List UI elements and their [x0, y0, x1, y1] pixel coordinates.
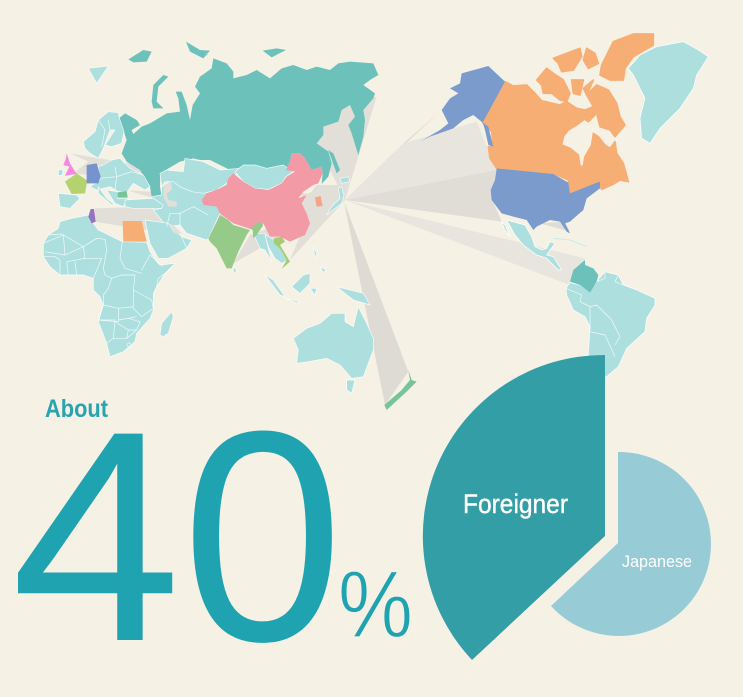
Scandinavia: [83, 112, 124, 158]
light teal countries: [43, 66, 373, 378]
Bulgaria: [117, 191, 128, 198]
New Guinea: [337, 287, 370, 305]
Sulawesi: [310, 288, 317, 295]
Ireland: [58, 169, 63, 176]
Greenland and New Zealand: [347, 42, 708, 410]
label: Japanese: Japanese: [622, 552, 692, 571]
Mexico and Central America: [507, 220, 562, 270]
India: [208, 215, 263, 268]
United States and Alaska: [420, 66, 600, 233]
Caspian Sea and Persian Gulf patches: [163, 183, 182, 234]
Vietnam: [274, 237, 290, 269]
Italy: [98, 187, 115, 205]
Borneo: [292, 273, 310, 293]
Svalbard: [88, 66, 108, 83]
New Zealand: [384, 370, 417, 410]
Kazakhstan: [160, 158, 240, 193]
label: Foreigner: Foreigner: [463, 489, 568, 519]
Cuba: [553, 238, 587, 247]
Australia: [293, 307, 373, 378]
Greenland: [628, 42, 708, 143]
Thailand and Laos: [265, 235, 288, 263]
big number: 40: 4: [11, 370, 181, 697]
Madagascar: [160, 312, 173, 337]
China: [202, 153, 323, 242]
Mongolia: [235, 165, 293, 189]
North America: [420, 34, 653, 233]
Africa internal borders: [43, 234, 172, 347]
Europe and Asia internal borders: [98, 120, 208, 248]
Colombia: [570, 260, 598, 293]
Tunisia: [88, 209, 96, 223]
Arabia: [145, 220, 192, 258]
world map: Eurasia, Africa and Australia: [43, 42, 378, 378]
France: [65, 173, 87, 194]
big number: 40: [11, 368, 343, 697]
big number: 40: 0: [182, 368, 343, 697]
Turkey: [125, 198, 163, 208]
South Korea: [315, 196, 323, 207]
United Kingdom: [63, 153, 77, 176]
rays from Japan to the west: [70, 97, 377, 263]
South America: [566, 272, 655, 377]
Canada: [483, 34, 653, 193]
Central Asia and Middle East: [152, 180, 233, 240]
Germany: [87, 163, 101, 183]
pie slice: Foreigner: [423, 355, 605, 660]
rays from Japan to the east and south: [344, 112, 585, 405]
Baja California: [502, 222, 510, 237]
Latin America: [502, 220, 655, 377]
South American borders: [566, 272, 623, 357]
heading: About: About: [45, 395, 109, 423]
Eastern Europe: [90, 158, 150, 192]
percent sign: %: [338, 552, 413, 658]
Japan: [327, 187, 344, 215]
Balkans: [107, 190, 128, 207]
pie slice: Japanese: [551, 452, 711, 636]
Myanmar: [253, 233, 272, 262]
Russia: [119, 42, 378, 197]
Java: [285, 298, 300, 303]
Egypt: [123, 221, 147, 242]
Spain: [58, 193, 80, 208]
Tasmania: [347, 380, 355, 393]
Sri Lanka: [233, 267, 237, 273]
Africa: [43, 215, 175, 357]
Hokkaido: [340, 177, 350, 183]
Sumatra: [265, 275, 285, 297]
Luzon: [313, 247, 317, 258]
Mindanao: [320, 267, 326, 273]
